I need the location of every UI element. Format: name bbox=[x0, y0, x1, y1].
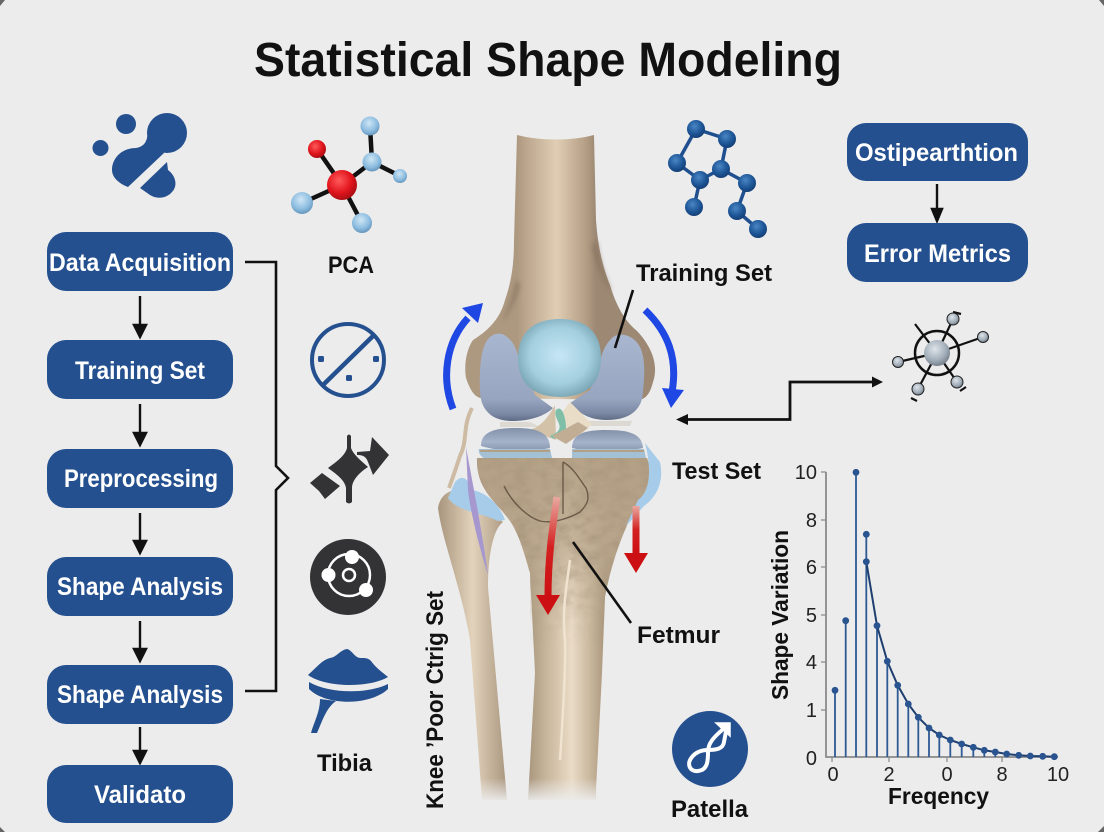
x tick labels: 0 bbox=[941, 764, 953, 786]
patella blob bbox=[518, 319, 601, 397]
left ligament strands bbox=[449, 408, 472, 488]
stems bbox=[835, 472, 995, 757]
arrow: red main bbox=[536, 497, 560, 615]
icon: patella circle bbox=[672, 711, 748, 787]
fibula bbox=[438, 490, 507, 800]
y tick labels: 10 bbox=[795, 462, 817, 484]
box: Error Metrics bbox=[847, 223, 1028, 282]
label: rotated Knee: Knee ’Poor Ctrig Set bbox=[422, 591, 449, 809]
x tick labels: 10 bbox=[1047, 764, 1069, 786]
icon: tibia bbox=[308, 649, 388, 733]
chart: shape variation vs frequency bbox=[767, 462, 1069, 809]
double arrow connector bbox=[676, 376, 883, 425]
femur shadows bbox=[502, 240, 612, 322]
tibia upper tint bbox=[477, 458, 651, 620]
meniscus strip bbox=[500, 421, 632, 427]
y tick labels: 1 bbox=[806, 700, 817, 722]
bottom fade bbox=[476, 778, 606, 802]
box: Training Set bbox=[47, 340, 233, 399]
y tick labels: 5 bbox=[806, 605, 817, 627]
blue tissue right bbox=[626, 443, 661, 526]
icon: slashed circle bbox=[312, 324, 384, 396]
y tick labels: 4 bbox=[806, 652, 817, 674]
flow: left process column bbox=[47, 232, 233, 823]
icon: gray hub bbox=[892, 312, 988, 401]
purple ligament bbox=[466, 447, 488, 575]
box: Error Metrics: Error Metrics bbox=[864, 240, 1011, 268]
label: Tibia: Tibia bbox=[317, 750, 373, 777]
x tick labels: 8 bbox=[996, 764, 1008, 786]
box: Data Acquisition: Data Acquisition bbox=[49, 249, 231, 277]
leader: Femur bbox=[573, 542, 631, 623]
box: Preprocessing bbox=[47, 449, 233, 508]
tibial plateau left bbox=[481, 428, 550, 451]
label: Training Set: Training Set bbox=[636, 260, 772, 287]
y tick labels: 6 bbox=[806, 557, 817, 579]
data points bbox=[832, 469, 1058, 760]
box: Ostipearthtion: Ostipearthtion bbox=[855, 139, 1018, 167]
plateau band bbox=[479, 449, 646, 458]
box: Shape Analysis bbox=[47, 557, 233, 616]
y tick labels: 0 bbox=[806, 748, 817, 770]
arrow bbox=[134, 296, 146, 337]
tibia mottled texture bbox=[480, 458, 620, 618]
right condyle bbox=[570, 335, 644, 420]
icon: PCA molecule bbox=[291, 116, 407, 233]
x tick labels bbox=[827, 764, 1069, 786]
box: Shape Analysis 2: Shape Analysis bbox=[57, 681, 223, 709]
icon: blue network bbox=[668, 120, 767, 238]
arrow bbox=[932, 184, 942, 221]
fracture outline bbox=[504, 462, 588, 522]
blue tissue left bbox=[448, 478, 505, 521]
arrow: red right bbox=[624, 506, 648, 573]
box: Shape Analysis 2 bbox=[47, 665, 233, 724]
y axis title: Shape Variation bbox=[767, 530, 793, 700]
arrow: blue rotation right bbox=[645, 310, 684, 408]
box: Shape Analysis: Shape Analysis bbox=[57, 573, 223, 601]
x tick labels: 2 bbox=[883, 764, 895, 786]
illustration: knee anatomy bbox=[438, 135, 661, 802]
box: Data Acquisition bbox=[47, 232, 233, 291]
arrow bbox=[134, 727, 146, 763]
curve bbox=[866, 562, 1054, 757]
icon: dark orbit circle bbox=[310, 539, 386, 615]
label: Test Set: Test Set bbox=[672, 458, 761, 485]
title: Statistical Shape Modeling bbox=[254, 34, 842, 87]
tibial plateau right bbox=[572, 430, 643, 451]
arrow bbox=[134, 513, 146, 553]
x tick labels: 0 bbox=[827, 764, 839, 786]
femur bbox=[465, 135, 655, 400]
label: Fetmur: Fetmur bbox=[637, 622, 720, 649]
icon: star fragments bbox=[310, 434, 389, 504]
y tick labels bbox=[795, 462, 817, 770]
box: Preprocessing: Preprocessing bbox=[64, 465, 218, 493]
box: Validato bbox=[47, 765, 233, 823]
bracket connector bbox=[245, 262, 288, 691]
box: Ostipearthtion bbox=[847, 123, 1028, 181]
tibia shaft crest bbox=[560, 560, 570, 760]
box: Validato: Validato bbox=[94, 781, 186, 809]
x axis title: Freqency bbox=[888, 783, 989, 809]
tibia body bbox=[477, 458, 651, 800]
y tick labels: 8 bbox=[806, 510, 817, 532]
arrow bbox=[134, 621, 146, 661]
cruciate ligaments bbox=[528, 402, 592, 444]
arrow: blue rotation left bbox=[447, 303, 483, 409]
label: PCA: PCA bbox=[328, 252, 374, 279]
arrow bbox=[134, 404, 146, 445]
left condyle bbox=[480, 334, 553, 421]
box: Training Set: Training Set bbox=[75, 357, 206, 385]
label: Patella: Patella bbox=[671, 796, 749, 823]
leader: Training Set bbox=[615, 290, 633, 348]
icon: bone dumbbell bbox=[92, 113, 187, 198]
axes bbox=[826, 472, 1058, 757]
